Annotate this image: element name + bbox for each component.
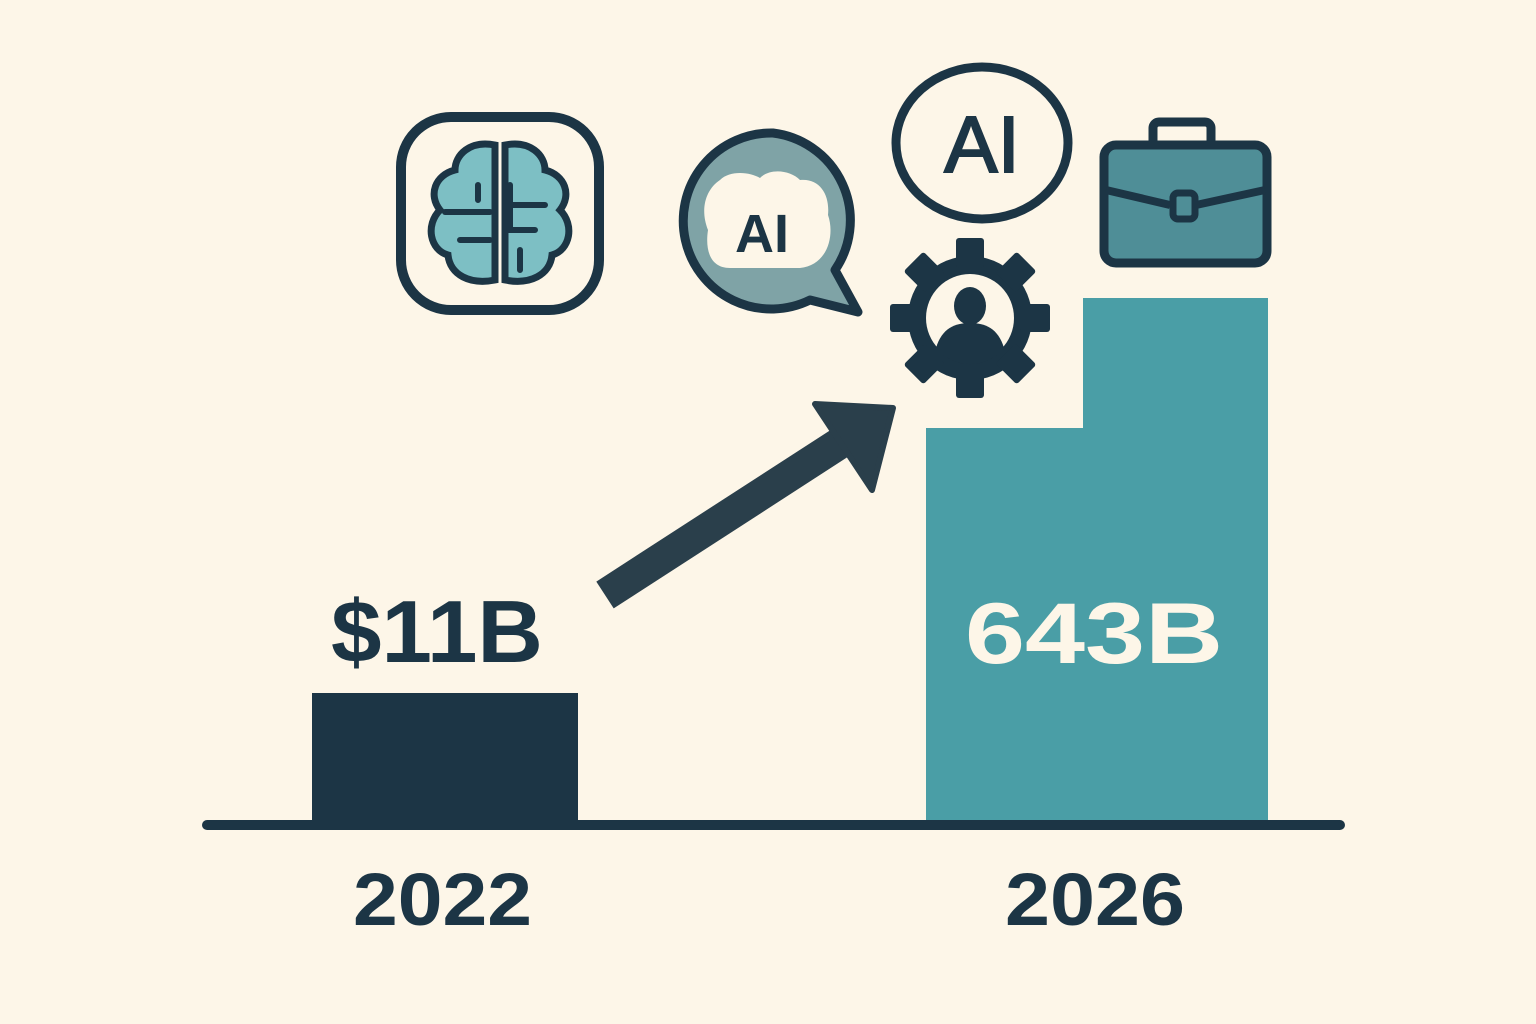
icon: brain in rounded square: [401, 117, 599, 310]
label: 2022: 2022: [353, 858, 532, 941]
label: 2026: 2026: [1005, 858, 1185, 941]
icon: AI circle: AI: [944, 100, 1020, 189]
bar: 2026: [926, 298, 1268, 822]
icon: briefcase: [1104, 122, 1267, 263]
icon: AI speech bubble: [683, 133, 858, 312]
axis: [207, 820, 1340, 830]
icon: AI circle: [896, 67, 1068, 219]
bar: 2022: [312, 693, 578, 822]
arrow: [605, 404, 893, 595]
label: 643B: 643B: [965, 586, 1223, 682]
icon: gear with person: [890, 238, 1050, 398]
icon: AI speech bubble: AI: [735, 204, 789, 264]
label: $11B: $11B: [331, 582, 543, 681]
